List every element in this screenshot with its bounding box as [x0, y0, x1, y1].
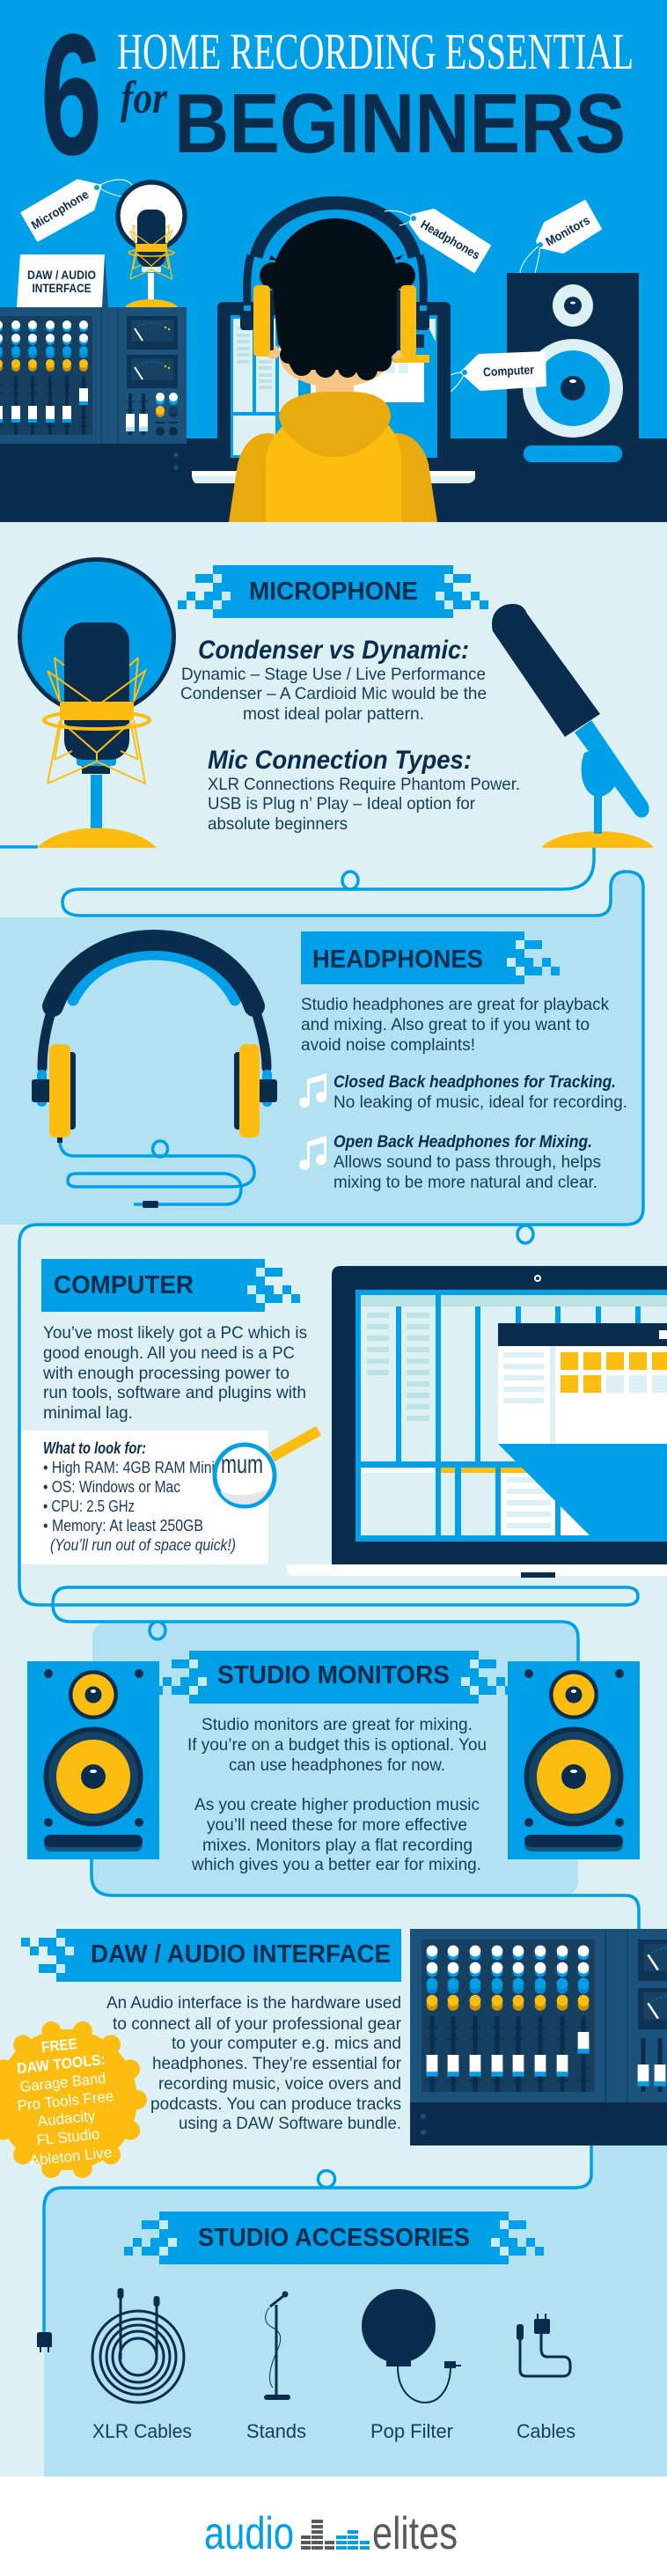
panel: microphone [19, 560, 654, 848]
icon: right speaker [508, 1661, 640, 1859]
card: what to look for: • OS: Windows or Mac [43, 1478, 180, 1496]
icon: magnifier: mum [221, 1450, 263, 1479]
panel background: studio accessories [44, 2145, 667, 2477]
icon: magnifier [215, 1431, 319, 1506]
icon: plug [37, 2332, 52, 2352]
card: what to look for: What to look for: [43, 1439, 146, 1457]
connecting audio cable [0, 847, 643, 2333]
badge: free DAW tools [0, 2029, 137, 2170]
tag: Headphones: Headphones [419, 217, 483, 262]
desk [0, 438, 667, 522]
icon: XLR cables [92, 2288, 184, 2403]
tag: Monitors [520, 201, 601, 273]
icon: pop filter [362, 2289, 461, 2403]
text: closed back: Closed Back headphones for Tracking. [334, 1072, 616, 1092]
text: audio interface description: headphones. They’re essential for [152, 2055, 402, 2073]
desktop monitor [192, 302, 475, 483]
desk note: DAW / Audio Interface [17, 254, 108, 307]
badge: free DAW tools: Audacity [37, 2108, 97, 2130]
panel: studio monitors [27, 1651, 640, 1874]
icon: cables [517, 2314, 570, 2376]
icon: handheld microphone on stand [492, 604, 654, 848]
heading: DAW / audio interface: DAW / AUDIO INTERFACE [91, 1940, 391, 1969]
text: condenser vs dynamic [180, 636, 487, 724]
heading: headphones [301, 931, 560, 984]
text: open back: Allows sound to pass through, helps [334, 1152, 601, 1172]
icon: laptop [286, 1266, 667, 1578]
text: condenser vs dynamic: most ideal polar pattern. [243, 704, 424, 724]
footer logo: audio [204, 2508, 294, 2559]
card: what to look for: • CPU: 2.5 GHz [43, 1498, 135, 1515]
text: closed back: No leaking of music, ideal for recording. [334, 1093, 627, 1112]
text: monitors first paragraph: If you’re on a budget this is optional. You [187, 1735, 487, 1755]
text: audio interface description: to your computer e.g. mics and [172, 2035, 401, 2053]
small studio microphone [118, 182, 185, 307]
icon: left speaker [27, 1661, 159, 1859]
label: stands: Stands [246, 2420, 306, 2442]
heading: studio monitors: STUDIO MONITORS [217, 1661, 450, 1689]
text: mic connection types: XLR Connections Require Phantom Power. [208, 775, 520, 794]
text: headphones intro [301, 995, 609, 1055]
text: monitors second paragraph: you’ll need these for more effective [207, 1815, 467, 1835]
text: headphones intro: Studio headphones are great for playback [301, 995, 609, 1014]
text: computer intro: You’ve most likely got a PC which is [43, 1323, 307, 1343]
heading: microphone [178, 565, 488, 618]
text: open back: mixing to be more natural and clear. [334, 1173, 597, 1192]
studio speaker [507, 273, 639, 462]
heading: computer: COMPUTER [54, 1271, 194, 1299]
text: monitors first paragraph: Studio monitors are great for mixing. [202, 1715, 473, 1734]
tag: Computer [451, 352, 546, 392]
tag: Headphones [385, 210, 490, 272]
icon: audio interface mixer [410, 1929, 667, 2145]
icon: music note [299, 1073, 326, 1108]
panel: studio accessories [37, 2212, 575, 2442]
text: computer intro: minimal lag. [43, 1403, 133, 1423]
footer background [0, 2477, 667, 2576]
hero banner [0, 0, 667, 522]
text: computer intro: good enough. All you need is a PC [43, 1343, 295, 1363]
person with headphones [229, 202, 437, 522]
text: audio interface description [106, 1994, 402, 2133]
label: cables: Cables [517, 2420, 575, 2442]
card: what to look for: • Memory: At least 250GB [43, 1517, 203, 1535]
panel: DAW / audio interface [0, 1929, 667, 2170]
icon: music note [299, 1136, 326, 1170]
badge: free DAW tools: DAW TOOLS: [16, 2051, 106, 2077]
tag: Monitors: Monitors [543, 213, 592, 248]
badge: free DAW tools: FL Studio [36, 2125, 100, 2149]
panel: headphones [32, 931, 627, 1208]
footer logo: elites [372, 2508, 458, 2559]
heading: computer [41, 1259, 300, 1312]
text: computer intro: with enough processing power to [42, 1364, 290, 1383]
text: audio interface description: to connect all of your professional gear [113, 2015, 402, 2034]
text: computer intro: run tools, software and plugins with [43, 1383, 306, 1402]
heading: studio monitors [154, 1651, 514, 1704]
title: BEGINNERS [174, 77, 626, 171]
text: monitors first paragraph [187, 1715, 487, 1775]
badge: free DAW tools: Ableton Live [29, 2144, 113, 2169]
panel background: studio monitors [92, 1623, 578, 1895]
text: mic connection types [208, 746, 520, 834]
text: mic connection types: USB is Plug n’ Play – Ideal option for [208, 794, 475, 813]
text: open back [334, 1132, 601, 1192]
icon: headphones [32, 940, 277, 1208]
title: 6 [40, 0, 102, 191]
text: condenser vs dynamic: Dynamic – Stage Use / Live Performance [181, 665, 486, 684]
text: mic connection types: Mic Connection Types: [208, 746, 472, 775]
text: audio interface description: podcasts. You can produce tracks [150, 2095, 401, 2114]
badge: free DAW tools: Pro Tools Free [17, 2087, 114, 2115]
title [40, 0, 634, 191]
text: closed back [334, 1072, 627, 1112]
text: condenser vs dynamic: Condenser – A Cardioid Mic would be the [180, 684, 487, 703]
tag: Computer: Computer [483, 362, 535, 379]
badge: free DAW tools: Garage Band [19, 2070, 106, 2095]
badge: free DAW tools: FREE [40, 2035, 78, 2056]
text: audio interface description: recording music, voice overs and [158, 2075, 401, 2094]
label: XLR cables: XLR Cables [92, 2420, 192, 2442]
text: audio interface description: using a DAW Software bundle. [179, 2115, 401, 2133]
mixer [0, 307, 187, 470]
panel: computer [21, 1259, 667, 1578]
label: pop filter: Pop Filter [370, 2420, 453, 2442]
tag: Microphone [22, 180, 132, 240]
text: mic connection types: absolute beginners [208, 814, 348, 834]
text: computer intro [42, 1323, 307, 1423]
footer logo [204, 2508, 458, 2559]
hero background [0, 0, 667, 521]
card: what to look for: (You’ll run out of space quick!) [50, 1536, 236, 1554]
text: audio interface description: An Audio interface is the hardware used [106, 1994, 401, 2013]
panel background: headphones [0, 872, 643, 1225]
heading: microphone: MICROPHONE [249, 578, 418, 606]
title: for [121, 73, 168, 123]
icon: studio microphone [19, 560, 174, 848]
text: monitors second paragraph: which gives you a better ear for mixing. [191, 1855, 481, 1874]
text: condenser vs dynamic: Condenser vs Dynamic: [198, 636, 469, 665]
card: what to look for: • High RAM: 4GB RAM Mini [43, 1459, 215, 1476]
text: monitors first paragraph: can use headphones for now. [229, 1755, 445, 1775]
heading: studio accessories [124, 2212, 544, 2264]
text: headphones intro: and mixing. Also great to if you want to [301, 1015, 590, 1034]
desk note: DAW / Audio Interface: DAW / AUDIO [27, 268, 96, 282]
heading: studio accessories: STUDIO ACCESSORIES [198, 2224, 470, 2252]
heading: headphones: HEADPHONES [312, 946, 483, 974]
text: monitors second paragraph [191, 1795, 481, 1874]
text: open back: Open Back Headphones for Mixing. [334, 1132, 592, 1152]
text: monitors second paragraph: mixes. Monitors play a flat recording [202, 1836, 473, 1855]
desk note: DAW / Audio Interface: INTERFACE [32, 281, 92, 295]
card: what to look for [21, 1431, 268, 1564]
text: monitors second paragraph: As you create higher production music [194, 1795, 480, 1814]
heading: DAW / audio interface [21, 1929, 401, 1982]
icon: microphone stand [264, 2291, 290, 2400]
tag: Microphone: Microphone [29, 187, 92, 232]
page background [0, 521, 667, 2477]
text: headphones intro: avoid noise complaints! [301, 1035, 475, 1055]
